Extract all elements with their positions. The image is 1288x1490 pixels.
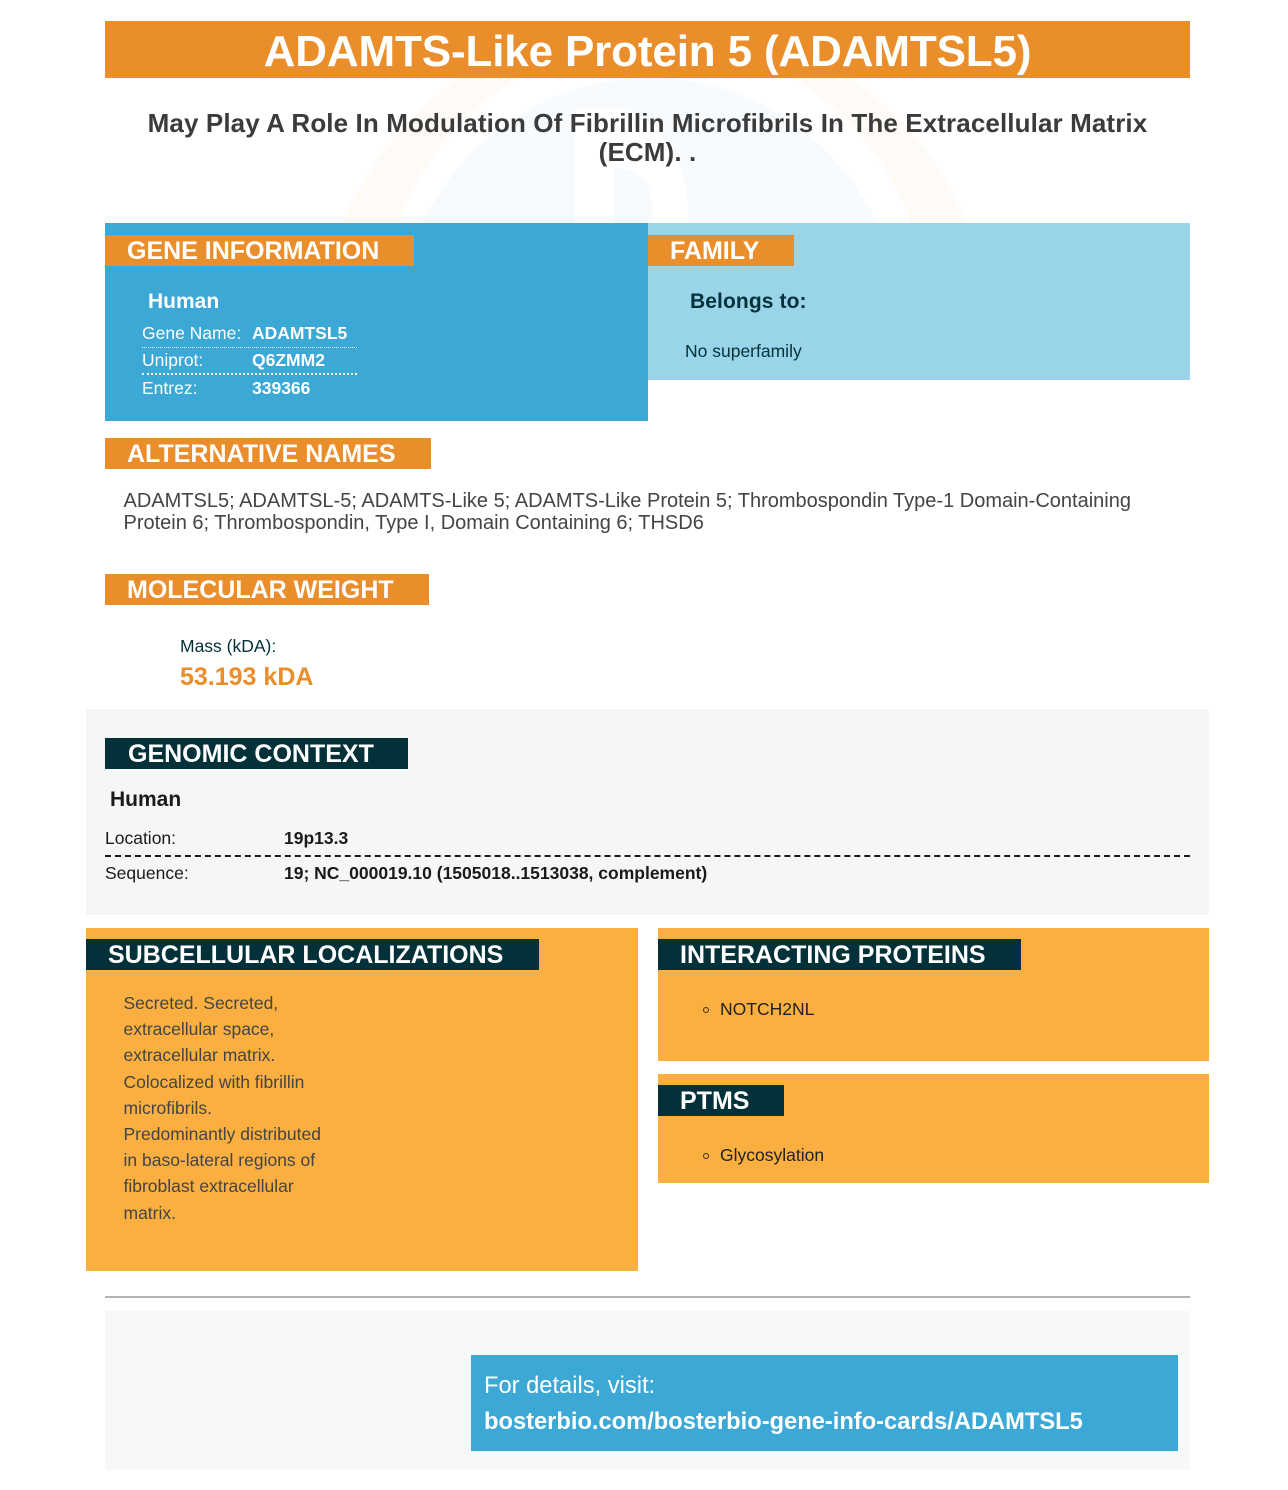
heading: ptms: PTMS [680, 1087, 749, 1115]
gene name row: Gene Name: [142, 323, 241, 343]
panel: genomic context [86, 709, 1209, 915]
title banner [105, 21, 1190, 78]
bullet marker [703, 1153, 709, 1159]
localization text: Secreted. Secreted, extracellular space, extracellular matrix. Colocalized with fibrillin microfibrils. Predominantly distributed in baso-lateral regions of fibroblast extracellular matrix. [124, 993, 321, 1223]
panel: gene information [105, 223, 648, 421]
heading: gene information: GENE INFORMATION [127, 237, 379, 265]
panel: ptms [658, 1074, 1209, 1183]
heading: family: FAMILY [670, 237, 759, 265]
call to action box [471, 1355, 1178, 1451]
mass label: Mass (kDA): [180, 636, 276, 656]
entrez row: 339366 [252, 378, 310, 398]
footer panel [105, 1311, 1190, 1470]
protein item: NOTCH2NL [720, 999, 814, 1019]
gene name row: ADAMTSL5 [252, 323, 347, 343]
superfamily value: No superfamily [685, 341, 802, 361]
title banner: ADAMTS-Like Protein 5 (ADAMTSL5) [264, 27, 1031, 76]
visit label: For details, visit: [484, 1373, 655, 1399]
subtitle: May Play A Role In Modulation Of Fibrillin Microfibrils In The Extracellular Matrix (ECM). . [148, 108, 1147, 167]
heading: molecular weight: MOLECULAR WEIGHT [127, 576, 394, 604]
divider [105, 1296, 1190, 1298]
heading: interacting proteins: INTERACTING PROTEINS [680, 941, 986, 969]
sequence row: Sequence: [105, 863, 189, 883]
species label: Human [148, 290, 219, 313]
species label: Human [110, 788, 181, 811]
heading: subcellular localizations: SUBCELLULAR LOCALIZATIONS [108, 941, 503, 969]
alternative names text: ADAMTSL5; ADAMTSL-5; ADAMTS-Like 5; ADAMTS-Like Protein 5; Thrombospondin Type-1 Domain-Containing Protein 6; Thrombospondin, Type I, Domain Containing 6; THSD6 [124, 490, 1131, 534]
gene name row [142, 322, 357, 348]
sequence row: 19; NC_000019.10 (1505018..1513038, complement) [284, 863, 707, 883]
panel: family [648, 223, 1190, 380]
entrez row: Entrez: [142, 378, 197, 398]
heading: genomic context: GENOMIC CONTEXT [128, 740, 374, 768]
heading: family [648, 235, 794, 266]
location row [105, 827, 1190, 857]
background watermark [342, 78, 968, 223]
location row: Location: [105, 828, 176, 848]
belongs to label: Belongs to: [690, 290, 807, 313]
visit url: bosterbio.com/bosterbio-gene-info-cards/ADAMTSL5 [484, 1409, 1083, 1435]
uniprot row [142, 349, 357, 375]
entrez row [142, 378, 310, 398]
heading: alternative names: ALTERNATIVE NAMES [127, 440, 396, 468]
uniprot row: Q6ZMM2 [252, 350, 325, 370]
mass value: 53.193 kDA [180, 663, 313, 691]
ptm item: Glycosylation [720, 1145, 824, 1165]
heading: ptms [658, 1085, 784, 1116]
panel: interacting proteins [658, 928, 1209, 1061]
panel: subcellular localizations [86, 928, 638, 1271]
uniprot row: Uniprot: [142, 350, 203, 370]
bullet marker [703, 1007, 709, 1013]
location row: 19p13.3 [284, 828, 348, 848]
